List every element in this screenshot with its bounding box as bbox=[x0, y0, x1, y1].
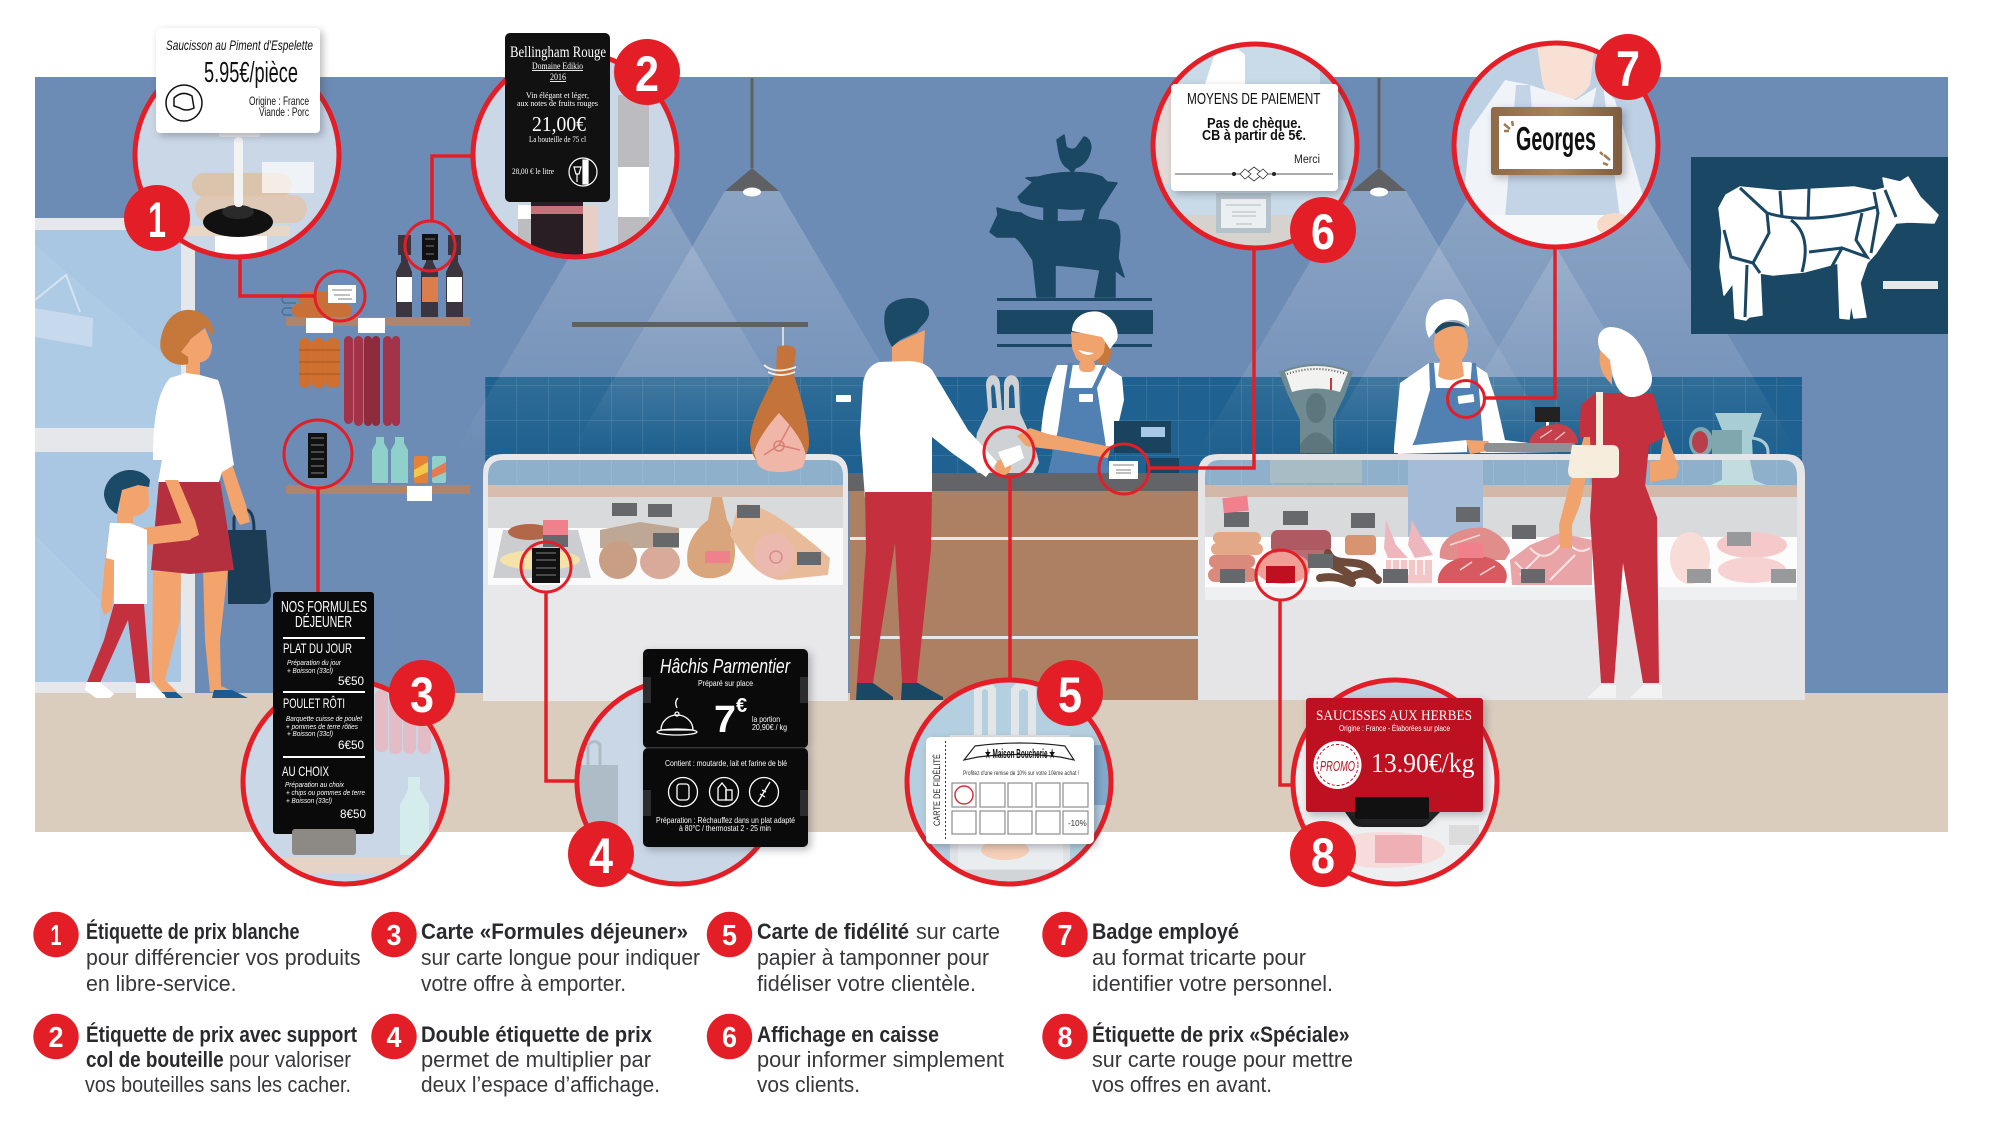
left arm bbox=[165, 480, 199, 540]
card 4: double price label: la portion bbox=[752, 714, 780, 724]
card 6: payment sign: MOYENS DE PAIEMENT bbox=[1187, 91, 1321, 108]
terrines bbox=[600, 522, 679, 548]
legend item 6 bbox=[707, 1014, 1004, 1097]
legend item 5: papier à tamponner pour bbox=[757, 945, 989, 970]
legend item 1: Étiquette de prix blanche bbox=[86, 919, 300, 944]
legend item 5 bbox=[707, 912, 1000, 996]
ghost bottles bbox=[518, 95, 649, 265]
card 3: formules dejeuner: DÉJEUNER bbox=[295, 612, 352, 631]
customer man bbox=[856, 298, 1011, 700]
scale base and lower apron through glass bbox=[1270, 460, 1766, 537]
boy hair bbox=[104, 470, 150, 514]
sausage rolls on shelf bbox=[298, 292, 340, 304]
hair bbox=[1095, 339, 1111, 365]
customer woman with child bbox=[85, 310, 271, 698]
legend item 1: en libre-service. bbox=[86, 971, 237, 996]
card 1: white price label: 5.95€/pièce bbox=[204, 57, 298, 89]
legend item 7: Badge employé bbox=[1092, 919, 1239, 944]
face bbox=[1600, 345, 1612, 385]
legend item 8: vos offres en avant. bbox=[1092, 1072, 1272, 1097]
promo stamp bbox=[1314, 741, 1362, 789]
card 2: bottle collar label: Bellingham Rouge bbox=[510, 44, 606, 61]
shirt bbox=[860, 361, 997, 498]
legend item 4: Double étiquette de prix bbox=[421, 1022, 653, 1047]
legend item 2: pour valoriser bbox=[229, 1047, 351, 1072]
face bbox=[1071, 332, 1106, 363]
hanging orange sausages bbox=[299, 338, 340, 388]
legend item 1 bbox=[33, 912, 361, 996]
number badge 6 bbox=[1290, 197, 1356, 263]
legend item 8: sur carte rouge pour mettre bbox=[1092, 1047, 1353, 1072]
card 1: white price label: Viande : Porc bbox=[259, 105, 309, 119]
wine bottles bbox=[396, 235, 463, 317]
central counter bbox=[848, 473, 1198, 700]
arm hand bbox=[995, 459, 1011, 475]
card 1: white price label: Origine : France bbox=[249, 94, 309, 108]
small red label bbox=[1266, 566, 1295, 583]
shoes bbox=[856, 683, 893, 700]
magnifier 2 bbox=[473, 53, 677, 265]
magnifier 1 bbox=[132, 89, 342, 260]
price stand 1 bbox=[203, 125, 273, 237]
number badge 6: 6 bbox=[1311, 204, 1335, 260]
shelf 1 bbox=[286, 317, 470, 326]
lamp 1 bbox=[725, 78, 779, 196]
sausages bbox=[1211, 532, 1263, 555]
cash desk sign small bbox=[1109, 461, 1138, 479]
card 5: loyalty card: Profitez d'une remise de 10% sur votre 10ème achat ! bbox=[963, 770, 1079, 777]
hanging rail bbox=[572, 322, 808, 327]
hair bbox=[884, 298, 929, 347]
card 4: double price label: Préparé sur place bbox=[698, 678, 753, 688]
neck bbox=[892, 330, 925, 364]
cap bbox=[1426, 299, 1469, 338]
butcher man bbox=[1394, 299, 1560, 454]
number badge 3 bbox=[389, 660, 455, 726]
ghost butcher bbox=[1465, 46, 1642, 244]
legend item 4: 4 bbox=[386, 1022, 402, 1054]
orange terrine bbox=[1345, 535, 1376, 555]
icon: cow cuts bbox=[1719, 177, 1938, 320]
card 6: payment sign: Pas de chèque. bbox=[1207, 116, 1301, 132]
apron bbox=[1048, 363, 1110, 473]
boy shirt bbox=[106, 523, 147, 604]
legend item 5: sur carte bbox=[916, 919, 1000, 944]
hand-bag bbox=[1568, 392, 1619, 478]
number badge 2: 2 bbox=[635, 46, 659, 102]
legend item 6: Affichage en caisse bbox=[757, 1022, 939, 1047]
card 4: double price label: Hâchis Parmentier bbox=[660, 656, 791, 678]
ornament bbox=[1175, 167, 1333, 181]
number badge 5: 5 bbox=[1058, 667, 1082, 723]
card 4: double price label: Contient : moutarde, lait et farine de blé bbox=[665, 758, 787, 768]
card 3: formules dejeuner: + pommes de terre rôties bbox=[286, 722, 358, 731]
legend item 5: fidéliser votre clientèle. bbox=[757, 971, 976, 996]
card 3: formules dejeuner bbox=[273, 592, 374, 834]
black clip bbox=[1355, 797, 1429, 819]
card 2: bottle collar label: 28,00 € le litre bbox=[512, 167, 554, 176]
shelf 2 bbox=[286, 485, 470, 494]
stamp grid bbox=[952, 783, 1088, 834]
magnifier 8 bbox=[1291, 678, 1499, 884]
legend item 8: Étiquette de prix «Spéciale» bbox=[1092, 1022, 1350, 1047]
wall shelf with charcuterie bbox=[282, 235, 808, 501]
card 2: bottle collar label bbox=[505, 33, 610, 202]
legend item 4: permet de multiplier par bbox=[421, 1047, 651, 1072]
card 4: double price label: 20,90€ / kg bbox=[752, 722, 787, 732]
card 3: formules dejeuner: 8€50 bbox=[340, 807, 366, 821]
ghost goods bbox=[280, 690, 431, 873]
card 2: bottle collar label: 2016 bbox=[550, 72, 566, 82]
tray of prepared dishes bbox=[493, 530, 591, 578]
hair bbox=[160, 310, 213, 365]
top bbox=[1579, 393, 1665, 487]
ghost cash desk bbox=[1156, 48, 1354, 246]
legend item 1: pour différencier vos produits bbox=[86, 945, 361, 970]
whole hams bbox=[687, 497, 735, 578]
ghost bag bbox=[580, 742, 618, 835]
legend item 8 bbox=[1042, 1014, 1353, 1097]
chart legend bar bbox=[1883, 281, 1938, 289]
boy arm bbox=[143, 522, 198, 545]
card 5: loyalty card: CARTE DE FIDÉLITÉ bbox=[932, 754, 942, 826]
carrier bag bbox=[973, 375, 1039, 476]
legend item 6: 6 bbox=[722, 1022, 737, 1054]
right display case bbox=[1198, 454, 1805, 700]
banner title bbox=[964, 743, 1074, 761]
right case meats bbox=[1208, 496, 1796, 585]
shirt bbox=[1041, 365, 1124, 447]
card 3: formules dejeuner: 5€50 bbox=[338, 674, 364, 688]
card 3: formules dejeuner: Barquette cuisse de poulet bbox=[286, 714, 363, 723]
neck and face bbox=[1438, 360, 1464, 380]
trousers bbox=[857, 492, 932, 683]
icon: pig logo bbox=[166, 85, 202, 121]
metal card holder bbox=[292, 829, 356, 855]
legend item 2: vos bouteilles sans les cacher. bbox=[85, 1072, 351, 1097]
card 4: double price label: 7 bbox=[714, 699, 736, 741]
magnifier 6 bbox=[1150, 40, 1370, 255]
legend item 7: identifier votre personnel. bbox=[1092, 971, 1333, 996]
ghost scene bbox=[184, 162, 314, 254]
blue tiled wall bbox=[485, 377, 1802, 477]
number badge 5 bbox=[1037, 660, 1103, 726]
legs bbox=[152, 572, 181, 694]
meat grinder bbox=[1689, 413, 1768, 485]
card 6: payment sign: Merci bbox=[1294, 154, 1320, 166]
child bbox=[85, 470, 198, 698]
card 4: double price label: € bbox=[736, 695, 747, 717]
legend item 7: 7 bbox=[1058, 920, 1072, 952]
steaks bbox=[1510, 533, 1592, 585]
magnifier 7 bbox=[1450, 43, 1670, 255]
boy trousers bbox=[87, 604, 150, 683]
legend item 4: deux l’espace d’affichage. bbox=[421, 1072, 660, 1097]
number badge 1: 1 bbox=[148, 192, 166, 248]
animal stack silhouette sign bbox=[990, 135, 1153, 347]
number badge 4: 4 bbox=[589, 828, 613, 884]
water bottles and cans bbox=[372, 437, 446, 483]
legend item 2 bbox=[33, 1014, 358, 1097]
top bbox=[153, 373, 234, 482]
card 1: white price label: Saucisson au Piment d'Espelette bbox=[166, 38, 313, 53]
boy neck and face bbox=[117, 510, 133, 526]
card 7: employee badge: Georges bbox=[1516, 120, 1596, 157]
legend item 3: Carte «Formules déjeuner» bbox=[421, 919, 688, 944]
legend item 3 bbox=[371, 912, 700, 996]
legend item 6: vos clients. bbox=[757, 1072, 860, 1097]
cap bbox=[1072, 311, 1118, 349]
pale cuts bbox=[1670, 532, 1710, 584]
card 3: formules dejeuner: Préparation au choix bbox=[285, 780, 344, 789]
number badge 8 bbox=[1290, 821, 1356, 887]
shop window bbox=[35, 218, 195, 693]
card 3: formules dejeuner: + Boisson (33cl) bbox=[287, 666, 333, 675]
dark sausage bbox=[1320, 553, 1378, 583]
icon: cloche bbox=[657, 698, 697, 735]
number badge 1 bbox=[124, 185, 190, 251]
card 3: formules dejeuner: 6€50 bbox=[338, 738, 364, 752]
card 8 stand bbox=[1345, 812, 1440, 827]
pink meat bbox=[1256, 552, 1310, 584]
front arm bbox=[1559, 430, 1594, 548]
icon: wine logo bbox=[569, 158, 597, 186]
card 5: loyalty card bbox=[926, 737, 1094, 844]
legend item 7 bbox=[1042, 912, 1333, 996]
card 8: red special label: SAUCISSES AUX HERBES bbox=[1316, 708, 1472, 724]
card 8: red special label: Origine : France - Élaborées sur place bbox=[1339, 724, 1450, 733]
number badge 7: 7 bbox=[1616, 41, 1640, 97]
ham hanging bbox=[750, 327, 809, 472]
promo stamp: PROMO bbox=[1320, 758, 1355, 775]
left case products bbox=[493, 497, 830, 580]
card 8: red special label bbox=[1306, 698, 1483, 819]
connector lines bbox=[240, 156, 1555, 785]
number badge 2 bbox=[614, 39, 680, 105]
number badge 4 bbox=[568, 821, 634, 887]
legend item 8: 8 bbox=[1058, 1022, 1072, 1054]
card 2: bottle collar label: 21,00€ bbox=[532, 112, 586, 136]
forearm bbox=[1017, 428, 1111, 458]
card 3: formules dejeuner: + Boisson (33cl) bbox=[287, 729, 333, 738]
number badge 3: 3 bbox=[410, 667, 434, 723]
card 4: double price label: à 80°C / thermostat 2 - 25 min bbox=[679, 823, 771, 833]
legend bbox=[33, 912, 1353, 1097]
card 3: formules dejeuner: PLAT DU JOUR bbox=[283, 640, 352, 656]
card 3: formules dejeuner: + chips ou pommes de terre bbox=[286, 788, 365, 797]
card 3: formules dejeuner: NOS FORMULES bbox=[281, 599, 367, 616]
number badge 7 bbox=[1595, 34, 1661, 100]
tiny labels inside highlight circles bbox=[308, 234, 1024, 583]
stamp bbox=[955, 786, 973, 804]
legend item 4 bbox=[371, 1014, 660, 1097]
face bbox=[181, 328, 212, 362]
card 5: loyalty card: -10% bbox=[1068, 819, 1087, 828]
card 6: payment sign: CB à partir de 5€. bbox=[1202, 128, 1306, 144]
card 7: employee badge bbox=[1491, 107, 1622, 175]
decorative marks bbox=[1504, 121, 1610, 165]
card 1: white price label bbox=[156, 28, 320, 133]
shoes bbox=[1587, 685, 1616, 698]
magnifier 3 bbox=[240, 682, 450, 886]
customer woman right bbox=[1559, 327, 1679, 698]
ghost label bbox=[1342, 682, 1479, 868]
card 2: bottle collar label: Vin élégant et léger, bbox=[526, 91, 589, 100]
small highlight circles bbox=[284, 221, 1484, 600]
legs and waist bbox=[1590, 485, 1659, 683]
meat tray with tag bbox=[1484, 407, 1578, 452]
legend item 2: col de bouteille bbox=[86, 1047, 224, 1072]
beef joint bbox=[1440, 528, 1510, 560]
legend item 1: 1 bbox=[50, 920, 62, 952]
price tags bbox=[1220, 507, 1545, 583]
small badge on the tile wall bbox=[836, 395, 851, 402]
card 4: double price label: Préparation : Réchauffez dans un plat adapté bbox=[656, 815, 795, 825]
legend item 2: 2 bbox=[48, 1022, 64, 1054]
card 3: formules dejeuner: AU CHOIX bbox=[282, 763, 329, 779]
shopping bag bbox=[228, 510, 271, 604]
card 2: bottle collar label: Domaine Edikio bbox=[532, 61, 583, 71]
legend item 5: 5 bbox=[722, 920, 737, 952]
legend item 5: Carte de fidélité bbox=[757, 919, 909, 944]
back wall bbox=[35, 77, 1948, 694]
saucisson bbox=[1271, 530, 1331, 554]
hanging red saucissons bbox=[344, 336, 400, 426]
ceiling lamps light beams bbox=[438, 191, 1814, 480]
right arm bbox=[220, 464, 250, 525]
card 4: double price label bbox=[643, 649, 808, 847]
card 8: red special label: 13.90€/kg bbox=[1371, 748, 1474, 778]
card 3: formules dejeuner: + Boisson (33cl) bbox=[286, 796, 332, 805]
butcher woman bbox=[1017, 311, 1124, 473]
hand bbox=[1466, 440, 1494, 454]
legend item 3: votre offre à emporter. bbox=[421, 971, 626, 996]
boy shoes bbox=[85, 682, 114, 698]
number badge 8: 8 bbox=[1311, 828, 1335, 884]
left display case bbox=[483, 454, 848, 701]
shoes bbox=[161, 692, 183, 698]
scale bbox=[1279, 364, 1353, 453]
icons: allergens bbox=[668, 778, 778, 806]
neck bbox=[186, 358, 200, 380]
card 3: formules dejeuner: Préparation du jour bbox=[287, 658, 341, 667]
legend item 6: pour informer simplement bbox=[757, 1047, 1004, 1072]
hair bbox=[1598, 327, 1652, 397]
lamp 2 bbox=[1352, 78, 1406, 196]
legend item 3: 3 bbox=[386, 920, 402, 952]
card 2: bottle collar label: La bouteille de 75 cl bbox=[529, 135, 587, 144]
back arm bbox=[1650, 430, 1679, 482]
lamb racks bbox=[1384, 520, 1433, 583]
magnifier 5 bbox=[905, 680, 1115, 890]
cash register bbox=[1114, 421, 1179, 482]
banner title: ★ Maison Boucherie ★ bbox=[985, 746, 1055, 761]
card 3: formules dejeuner: POULET RÔTI bbox=[283, 695, 345, 711]
legend item 2: Étiquette de prix avec support bbox=[86, 1022, 358, 1047]
card 2: bottle collar label: aux notes de fruits rouges bbox=[517, 99, 598, 108]
legend item 7: au format tricarte pour bbox=[1092, 945, 1306, 970]
magnifier 4 bbox=[577, 680, 781, 884]
floor bbox=[35, 693, 1948, 832]
price tags bbox=[543, 503, 821, 565]
name badge bbox=[1079, 394, 1093, 402]
name badge bbox=[1458, 394, 1474, 404]
beef cuts chart bbox=[1691, 157, 1948, 334]
skirt bbox=[151, 480, 234, 574]
card 6: payment sign bbox=[1171, 84, 1338, 191]
legend item 3: sur carte longue pour indiquer bbox=[421, 945, 700, 970]
ghost bag and hand bbox=[950, 683, 1108, 882]
